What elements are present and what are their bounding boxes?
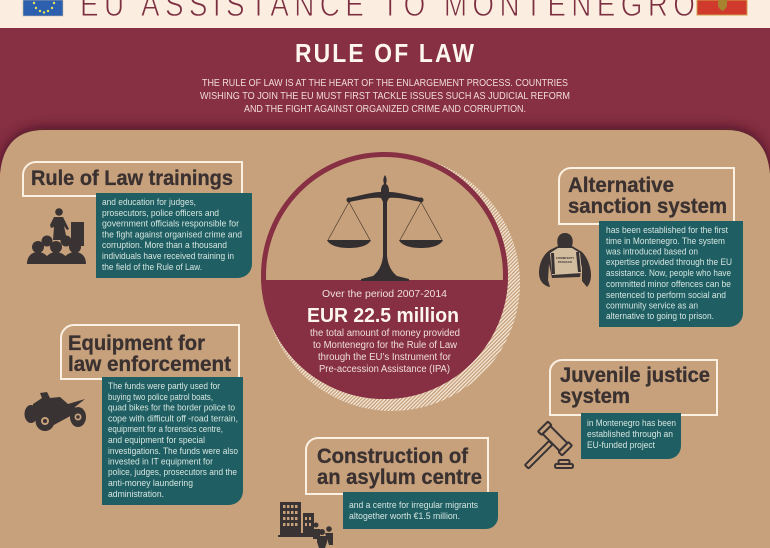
text box <box>96 193 252 278</box>
body text <box>349 500 478 522</box>
heading: Rule of Law trainings <box>31 167 233 190</box>
body text: and equipment for special <box>108 435 205 446</box>
heading: sanction system <box>568 195 727 218</box>
text box <box>343 492 498 529</box>
body text: altogether worth €1.5 million. <box>349 511 460 522</box>
heading: Equipment for <box>68 332 205 355</box>
heading: rule of law: RULE OF LAW <box>295 40 475 68</box>
body text <box>102 197 242 273</box>
body text: The funds were partly used for <box>108 381 220 392</box>
circle text: the total amount of money provided <box>310 328 460 339</box>
header band <box>0 0 770 28</box>
body text: invested in IT equipment for <box>108 456 213 468</box>
intro text: THE RULE OF LAW IS AT THE HEART OF THE ENLARGEMENT PROCESS. COUNTRIES <box>202 77 568 89</box>
body text: individuals have received training in <box>102 251 234 262</box>
panel: Rule of Law trainings <box>23 162 252 278</box>
intro text: WISHING TO JOIN THE EU MUST FIRST TACKLE ISSUES SUCH AS JUDICIAL REFORM <box>200 90 570 102</box>
body text: government officials responsible for <box>102 218 239 230</box>
body text: administration. <box>108 489 164 500</box>
intro text <box>200 77 570 115</box>
body text: corruption. More than a thousand <box>102 240 227 251</box>
intro text: AND THE FIGHT AGAINST ORGANIZED CRIME AND CORRUPTION. <box>244 103 526 115</box>
heading: Juvenile justice <box>560 364 710 387</box>
icon: trainer and audience <box>27 208 86 264</box>
body text: EU-funded project <box>587 440 655 451</box>
body text: has been established for the first <box>606 225 728 236</box>
vest label <box>556 256 574 264</box>
body text <box>108 381 238 500</box>
icon: EU flag <box>23 0 63 16</box>
circle text <box>307 288 460 375</box>
panel: Equipment for law enforcement <box>24 325 243 505</box>
heading <box>68 332 231 376</box>
body text: equipment for a forensics centre, <box>108 424 223 435</box>
body text <box>605 225 732 322</box>
body text: community service as an <box>606 300 698 312</box>
body text: anti-money laundering <box>108 478 193 489</box>
icon: quad bike <box>24 392 86 431</box>
circle text: Pre-accession Assistance (IPA) <box>319 364 450 375</box>
heading <box>317 445 482 489</box>
body text: established through an <box>587 429 673 440</box>
circle text: through the EU’s Instrument for <box>318 352 452 363</box>
body text: buying two police patrol boats, <box>108 392 213 403</box>
icon: building and people <box>278 502 333 548</box>
body text: expertise provided through the EU <box>606 257 732 268</box>
body text: sentenced to perform social and <box>606 290 726 301</box>
body text: the fight against organised crime and <box>102 230 242 240</box>
body text: prosecutors, police officers and <box>102 208 219 219</box>
circle text: EUR 22.5 million <box>307 305 459 327</box>
panel: main tan area <box>0 130 770 548</box>
body text: was introduced based on <box>605 246 698 258</box>
text box <box>102 377 243 505</box>
heading: law enforcement <box>68 353 231 376</box>
panel shadow <box>0 122 770 173</box>
body text: the field of the Rule of Law. <box>102 262 202 273</box>
body text <box>587 418 676 451</box>
circle ring <box>264 154 506 396</box>
text box <box>581 413 681 459</box>
icon: scales of justice <box>327 175 443 281</box>
body text: assistance. Now, people who have <box>606 268 731 279</box>
icon: gavel <box>515 422 573 479</box>
icon: community payback worker <box>539 233 591 287</box>
body text: police, judges, prosecutors and the <box>108 467 237 478</box>
circle hatch shadow <box>264 155 520 411</box>
vest label: PAYBACK <box>558 260 573 264</box>
circle text: to Montenegro for the Rule of Law <box>313 340 458 351</box>
heading: Construction of <box>317 445 469 468</box>
panel: Construction of an asylum centre <box>278 438 498 548</box>
heading <box>560 364 710 408</box>
heading: an asylum centre <box>317 466 482 489</box>
body text: quad bikes for the border police to <box>108 402 235 414</box>
circle lower fill <box>261 280 508 399</box>
circle text: Over the period 2007-2014 <box>322 288 447 300</box>
panel: Juvenile justice system <box>515 360 717 479</box>
heading: Alternative <box>568 174 674 197</box>
heading <box>568 174 727 218</box>
body text: cope with difficult off -road terrain, <box>108 414 238 424</box>
central circle <box>261 152 520 411</box>
heading: system <box>560 385 630 408</box>
body text: committed minor offences can be <box>606 279 731 290</box>
body text: time in Montenegro. The system <box>606 236 725 247</box>
panel: Alternative sanction system <box>539 168 743 327</box>
body text: alternative to going to prison. <box>606 311 714 322</box>
text box <box>599 221 743 327</box>
body text: in Montenegro has been <box>587 418 676 429</box>
body text: and a centre for irregular migrants <box>349 500 478 511</box>
icon: Montenegro flag <box>697 0 747 15</box>
body text: investigations. The funds were also <box>108 446 238 457</box>
body text: and education for judges, <box>102 197 196 208</box>
vest label: COMMUNITY <box>556 256 574 260</box>
